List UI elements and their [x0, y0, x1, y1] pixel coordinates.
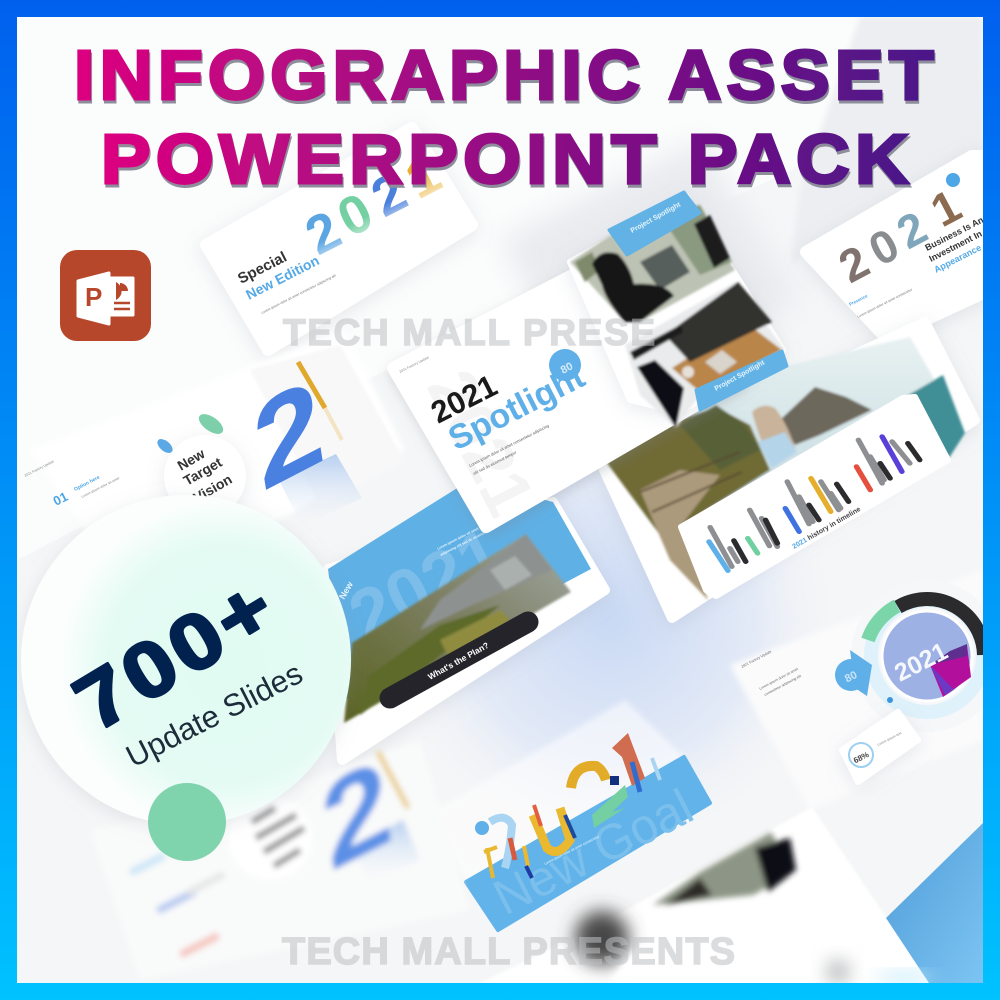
heading spotlight: Spotlight — [442, 357, 591, 458]
option item: 2021 Factory Update — [24, 459, 55, 478]
slide text: special new edition: New Edition — [243, 252, 322, 303]
slide text: special new edition: Special — [235, 249, 290, 288]
band caption: adipiscing elit sed do eiusmod tempor — [440, 524, 499, 557]
slide: spotlight — [393, 240, 740, 528]
blue band bottom — [696, 351, 787, 410]
heading: business: Business Is An — [923, 215, 985, 253]
blue band top — [609, 192, 700, 255]
grey blob right — [826, 960, 850, 984]
photo digits 2021: 2 — [830, 235, 877, 293]
circle: new target vision: Target — [180, 454, 225, 489]
blurred lower left slide — [90, 731, 470, 980]
option item: 01 — [51, 489, 70, 509]
title: INFOGRAPHIC ASSET — [74, 36, 939, 114]
photo digits 2021 — [840, 192, 964, 284]
slide: spotlight: 2021 Factory Update — [399, 355, 430, 374]
watermark top: TECH MALL PRESE — [283, 312, 655, 353]
small text: Lorem ipsum dolor sit amet — [759, 667, 799, 691]
slide: project spotlight photos — [570, 192, 787, 428]
donut label: 2021 — [890, 637, 952, 687]
donut rings — [868, 599, 984, 712]
68% card: 68% — [852, 750, 870, 765]
blue 80 badge — [835, 650, 872, 696]
slide: what's the plan — [328, 480, 605, 760]
band caption: Lorem ipsum dolor sit amet consectetur — [437, 517, 498, 551]
slide: 2021 donut — [730, 592, 983, 785]
blue band — [328, 480, 591, 700]
leaves — [157, 414, 224, 453]
badge: 80 — [559, 360, 575, 377]
illustrated 2021 — [475, 733, 645, 868]
icon: powerpoint: P — [85, 282, 102, 312]
slide text: special new edition: Lorem ipsum dolor sit amet consectetur adipiscing elit — [261, 274, 337, 315]
mountain photo — [344, 534, 571, 723]
yellow bar — [298, 362, 342, 440]
watermark bottom: TECH MALL PRESENTS — [282, 931, 735, 973]
blue dot — [887, 697, 893, 703]
heading: business: Appearance — [932, 242, 983, 275]
green circle — [148, 783, 226, 861]
blurred photo — [653, 832, 796, 905]
title — [74, 36, 939, 198]
slide: new goal — [431, 700, 710, 930]
slide: business 2021 — [806, 156, 990, 338]
option item: Option here — [73, 475, 101, 493]
photo digits 2021: 1 — [922, 179, 969, 237]
slide digits 2021: 2 — [362, 162, 416, 229]
number 700+: 700+ — [59, 560, 292, 747]
small text — [741, 650, 802, 697]
68% card: Lorem ipsum text — [877, 731, 902, 747]
bar chart — [709, 437, 920, 571]
photo digits 2021: 2 — [888, 201, 935, 259]
slide: landscape with history chart — [604, 322, 975, 618]
office photo — [570, 195, 735, 322]
heading 2021: 2021 — [425, 368, 503, 430]
blue 80 badge: 80 — [843, 669, 859, 685]
option item — [24, 460, 120, 505]
pill: what's the plan: What's the Plan? — [426, 640, 491, 682]
pale blue glow — [875, 973, 935, 983]
slide digits 2021 — [306, 162, 444, 255]
heading: business: Investment In — [927, 229, 984, 264]
faint digits: 2021 — [413, 358, 549, 528]
blue band bottom: Project Spotlight — [714, 359, 767, 393]
slide digits 2021: 0 — [328, 182, 382, 249]
blurred lower left slide: 2 — [313, 731, 399, 897]
photo digits 2021: 0 — [860, 218, 907, 276]
big circle: 700+ update slides — [21, 495, 351, 825]
desk photo — [625, 282, 785, 428]
illustrated people — [484, 758, 660, 878]
circle: new target vision: Vision — [190, 471, 235, 506]
68% card — [842, 712, 918, 782]
body text: Lorem ipsum dolor sit amet consectetur adipiscing — [468, 423, 550, 468]
slide: special new edition — [206, 128, 472, 350]
chart title: 2021 history in timeline — [792, 506, 862, 551]
big digit 2 — [258, 387, 362, 508]
slide: business 2021: Presence — [848, 293, 869, 307]
small text: 2021 Factory Update — [741, 650, 772, 669]
circle: new target vision — [162, 450, 248, 504]
small text: consectetur adipiscing elit — [764, 674, 802, 697]
faint 2021: 2021 — [337, 513, 516, 657]
body text: elit sed do eiusmod tempor — [472, 449, 518, 476]
slide: what's the plan: New — [337, 579, 355, 601]
dot and caption: Lorem ipsum dolor sit amet consectetur — [544, 834, 601, 866]
dark blurred blob — [575, 911, 629, 965]
icon: powerpoint — [60, 250, 151, 341]
title: POWERPOINT PACK — [101, 120, 914, 198]
slide: business 2021: Lorem ipsum dolor sit amet consectetur — [857, 287, 914, 319]
pie — [882, 611, 972, 701]
blue panel — [466, 757, 710, 930]
slide digits 2021: 2 — [296, 200, 350, 267]
blue band top: Project Spotlight — [630, 201, 683, 235]
badge — [549, 349, 581, 381]
landscape photo — [607, 337, 965, 600]
slide text: special new edition — [235, 249, 337, 315]
blue corner — [886, 823, 983, 983]
heading: business — [924, 218, 983, 273]
circle: new target vision: New — [174, 445, 208, 474]
slide: new target vision — [24, 353, 400, 527]
slide digits 2021: 1 — [396, 144, 450, 211]
white blurred overlay — [610, 912, 905, 983]
option item: Lorem ipsum dolor sit amet — [81, 476, 120, 499]
big digit 2: 2 — [245, 351, 331, 517]
faint new goal: New Goal — [485, 778, 702, 926]
label update slides: Update Slides — [120, 655, 308, 774]
pill: what's the plan — [390, 622, 528, 698]
lower right slide with photo — [480, 807, 983, 984]
chart panel — [681, 397, 948, 596]
donut glow — [851, 580, 1000, 732]
